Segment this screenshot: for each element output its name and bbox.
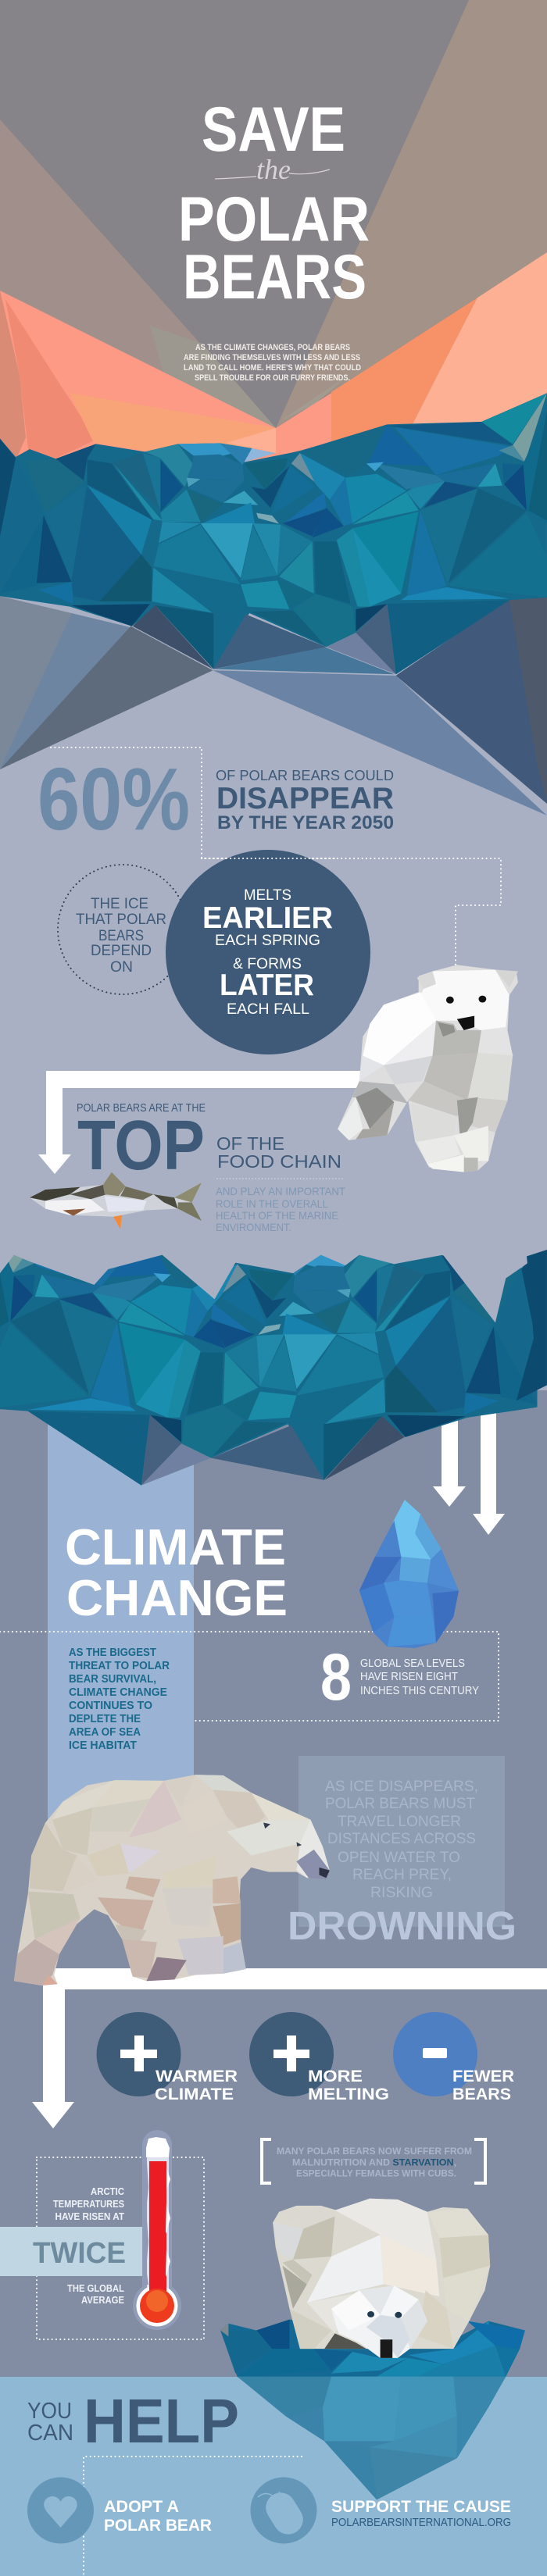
- stat: twice the global average: TWICE: [33, 2237, 126, 2270]
- action: support the cause: POLARBEARSINTERNATIONAL.ORG: [331, 2517, 511, 2529]
- iceberg: lower iceberg carrying mother and cub: [220, 2320, 525, 2499]
- text block: marine environment role: ENVIRONMENT.: [216, 1221, 291, 1233]
- dotted frame around arctic temperature stat: [37, 2157, 204, 2339]
- circle: melts earlier, forms later: EARLIER: [202, 901, 333, 935]
- stat: sea levels risen eight inches: 8: [320, 1640, 352, 1714]
- text block: marine environment role: ROLE IN THE OVERALL: [216, 1197, 328, 1210]
- text block: biggest threat: [69, 1647, 170, 1752]
- sky: low-poly sunset facets: [0, 0, 547, 469]
- callout: malnutrition and starvation: ESPECIALLY FEMALES WITH CUBS.: [296, 2170, 456, 2179]
- iceberg: upper low-poly ice mass: [0, 393, 547, 674]
- dotted circle: the ice polar bears depend on: THAT POLAR: [76, 912, 166, 928]
- circle: melts earlier, forms later: EACH SPRING: [215, 933, 320, 949]
- text block: biggest threat: AS THE BIGGEST: [69, 1647, 156, 1659]
- stat: 60 percent: BY THE YEAR 2050: [217, 812, 394, 833]
- heading: top of the food chain: POLAR BEARS ARE AT THE: [77, 1102, 206, 1115]
- arrow: from cub to food chain: [38, 1071, 367, 1174]
- circle: melts earlier, forms later: EACH FALL: [227, 1001, 309, 1018]
- intro text: LAND TO CALL HOME. HERE'S WHY THAT COULD: [184, 363, 361, 373]
- stat: 60 percent: [38, 750, 394, 848]
- stat: twice the global average: TEMPERATURES: [53, 2199, 124, 2210]
- dotted frame around sea level stat: [0, 1632, 499, 1721]
- icon: mother bear with cub: [273, 2199, 490, 2358]
- action: adopt a polar bear: ADOPT A: [104, 2498, 179, 2516]
- stat: twice the global average: ARCTIC: [91, 2186, 124, 2197]
- arrow: long white elbow arrow: [32, 1968, 547, 2128]
- panel: drowning text box: DISTANCES ACROSS: [327, 1831, 476, 1847]
- heading: climate change: [65, 1518, 288, 1626]
- text block: biggest threat: THREAT TO POLAR: [69, 1660, 170, 1672]
- heading: climate change: CHANGE: [66, 1569, 288, 1626]
- action: adopt a polar bear: POLAR BEAR: [104, 2517, 212, 2535]
- dotted connector line from top section: [51, 747, 501, 966]
- icon: polar bear cub: [338, 965, 518, 1172]
- dotted circle: the ice polar bears depend on: [58, 865, 188, 994]
- panel: drowning text box: TRAVEL LONGER: [338, 1814, 461, 1830]
- title: save the polar bears: the: [256, 154, 291, 185]
- action: support the cause: [331, 2498, 511, 2529]
- title: save the polar bears: [178, 95, 370, 312]
- icon: adult polar bear: [14, 1775, 330, 1986]
- heading: you can help: HELP: [84, 2386, 239, 2456]
- intro text: [184, 343, 361, 383]
- equation: warmer climate plus more melting minus fewer bears: FEWER: [452, 2068, 514, 2085]
- text block: marine environment role: [216, 1185, 345, 1233]
- dotted circle: the ice polar bears depend on: THE ICE: [91, 896, 148, 912]
- intro text: AS THE CLIMATE CHANGES, POLAR BEARS: [195, 343, 350, 352]
- stat: 60 percent: DISAPPEAR: [216, 782, 394, 815]
- text block: biggest threat: BEAR SURVIVAL,: [69, 1673, 156, 1686]
- iceberg: second mirrored ice mass with trimmed skyline: [0, 1250, 547, 1486]
- callout: malnutrition and starvation: MANY POLAR BEARS NOW SUFFER FROM: [277, 2147, 472, 2157]
- panel: drowning text box: DROWNING: [288, 1903, 517, 1948]
- equation: warmer climate plus more melting minus fewer bears: CLIMATE: [155, 2085, 234, 2103]
- heading: you can help: CAN: [27, 2421, 73, 2446]
- circle: melts earlier, forms later: & FORMS: [233, 956, 302, 972]
- circle: melts earlier, forms later: [166, 850, 370, 1054]
- equation: warmer climate plus more melting minus fewer bears: [97, 2012, 514, 2103]
- stat: sea levels risen eight inches: GLOBAL SEA LEVELS: [360, 1657, 465, 1670]
- circle: melts earlier, forms later: LATER: [220, 969, 314, 1002]
- panel: drowning text box: POLAR BEARS MUST: [325, 1796, 475, 1812]
- stat: twice the global average: THE GLOBAL: [67, 2283, 124, 2294]
- dotted circle: the ice polar bears depend on: DEPEND: [91, 943, 152, 959]
- panel: drowning text box: RISKING: [370, 1885, 433, 1901]
- action: adopt a polar bear: [104, 2498, 212, 2535]
- text block: marine environment role: AND PLAY AN IMPORTANT: [216, 1185, 345, 1197]
- heading: climate change: CLIMATE: [65, 1518, 286, 1575]
- text block: biggest threat: CONTINUES TO: [69, 1700, 152, 1712]
- stat: 60 percent: OF POLAR BEARS COULD: [216, 768, 394, 783]
- dotted circle: the ice polar bears depend on: BEARS: [98, 928, 144, 944]
- heading: top of the food chain: OF THE: [216, 1133, 284, 1154]
- intro text: ARE FINDING THEMSELVES WITH LESS AND LESS: [184, 353, 360, 362]
- heading: top of the food chain: [77, 1102, 341, 1185]
- panel: drowning text box: OPEN WATER TO: [338, 1850, 460, 1866]
- icon: low-poly fish: [30, 1172, 202, 1229]
- stat: twice the global average: AVERAGE: [81, 2295, 124, 2306]
- action: support the cause: SUPPORT THE CAUSE: [331, 2498, 511, 2516]
- panel: drowning text box: REACH PREY,: [352, 1867, 452, 1883]
- text block: biggest threat: CLIMATE CHANGE: [69, 1686, 167, 1699]
- callout: malnutrition and starvation: [262, 2139, 485, 2183]
- text block: biggest threat: DEPLETE THE: [69, 1713, 141, 1725]
- equation: warmer climate plus more melting minus fewer bears: BEARS: [452, 2085, 511, 2103]
- heading: you can help: [27, 2386, 239, 2456]
- title: save the polar bears: BEARS: [183, 242, 366, 312]
- icon: heart in circle: [27, 2478, 94, 2543]
- panel: drowning text box: AS ICE DISAPPEARS,: [325, 1779, 478, 1795]
- intro text: SPELL TROUBLE FOR OUR FURRY FRIENDS.: [195, 373, 350, 383]
- stat: twice the global average: [0, 2186, 143, 2306]
- icon: computer mouse in circle: [250, 2478, 317, 2543]
- text block: biggest threat: AREA OF SEA: [69, 1726, 141, 1739]
- panel: drowning text box: [288, 1756, 517, 1948]
- icon: thermometer: [133, 2130, 181, 2330]
- stat: sea levels risen eight inches: HAVE RISEN EIGHT: [360, 1671, 458, 1683]
- equation: warmer climate plus more melting minus fewer bears: MORE: [308, 2068, 363, 2085]
- stat: 60 percent: 60%: [38, 750, 190, 848]
- heading: top of the food chain: TOP: [77, 1107, 205, 1185]
- icon: water drop: [359, 1500, 459, 1648]
- dotted line in help section: [84, 2456, 302, 2576]
- heading: top of the food chain: FOOD CHAIN: [217, 1151, 341, 1172]
- arrows: two down arrows from iceberg: [433, 1390, 505, 1535]
- text block: biggest threat: ICE HABITAT: [69, 1739, 137, 1752]
- stat: sea levels risen eight inches: INCHES THIS CENTURY: [360, 1685, 479, 1697]
- callout: malnutrition and starvation: MALNUTRITION AND STARVATION ,: [292, 2159, 456, 2168]
- equation: warmer climate plus more melting minus fewer bears: WARMER: [156, 2068, 238, 2085]
- ground facets under the first iceberg: [0, 596, 547, 815]
- circle: melts earlier, forms later: MELTS: [244, 887, 291, 904]
- stat: sea levels risen eight inches: [320, 1640, 479, 1714]
- text block: marine environment role: HEALTH OF THE MARINE: [216, 1209, 338, 1222]
- heading: you can help: YOU: [27, 2399, 72, 2424]
- title: save the polar bears: SAVE: [202, 95, 345, 165]
- dotted circle: the ice polar bears depend on: ON: [110, 959, 133, 976]
- equation: warmer climate plus more melting minus fewer bears: MELTING: [308, 2085, 389, 2103]
- title: save the polar bears: POLAR: [178, 184, 370, 255]
- stat: twice the global average: HAVE RISEN AT: [55, 2211, 124, 2222]
- column: pale blue band behind climate change: [48, 1406, 194, 1828]
